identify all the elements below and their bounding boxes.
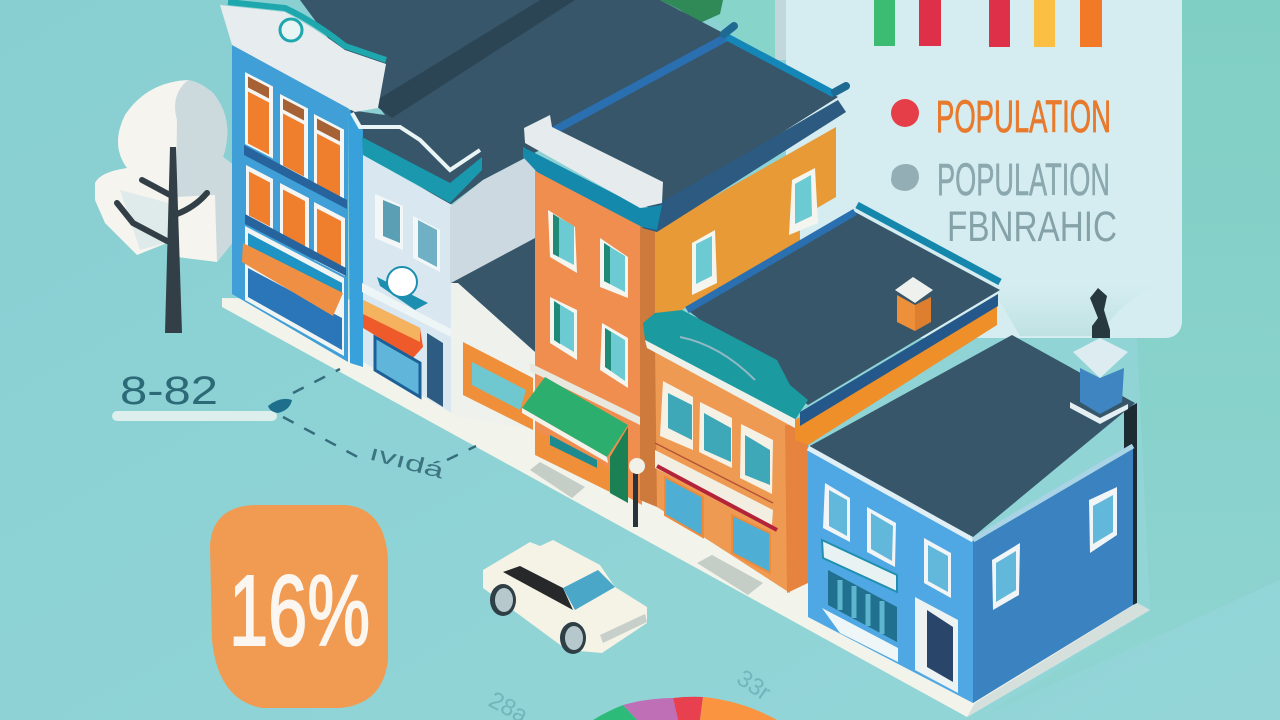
bar chart <box>874 0 1102 47</box>
legend item: population grey: FBNRAHIC <box>947 203 1117 251</box>
shop sign <box>822 540 897 592</box>
tree <box>95 80 253 333</box>
legend item: population grey: POPULATION <box>937 154 1110 205</box>
teal band under cornice <box>523 147 662 230</box>
car <box>483 540 647 654</box>
windows <box>660 381 773 494</box>
shop sign <box>363 300 423 358</box>
windows <box>548 168 818 388</box>
panel: population legend <box>775 0 1182 338</box>
ornate cornice <box>220 5 386 112</box>
legend item: population orange <box>891 91 1111 142</box>
building: orange brick <box>643 205 1000 593</box>
shopfront <box>655 450 773 525</box>
white cornice <box>524 115 663 208</box>
shop window <box>828 570 897 642</box>
round sign <box>377 267 428 310</box>
green tree behind roof <box>660 0 723 23</box>
tower ornament <box>1070 288 1128 424</box>
shop below green awning <box>530 363 640 492</box>
chimney <box>895 277 933 331</box>
dashed connectors <box>283 369 476 462</box>
sidewalk <box>222 298 1150 717</box>
windows <box>823 483 1117 610</box>
legend item: population grey <box>891 154 1117 251</box>
roofs: back row <box>300 0 727 205</box>
building: orange three storey <box>523 26 846 507</box>
windows <box>375 194 403 250</box>
roof <box>690 212 1000 405</box>
roof <box>553 37 838 210</box>
building: pale shop <box>352 113 535 413</box>
percentage badge: 16% <box>229 555 370 667</box>
road label: 8-82 <box>120 369 218 413</box>
pie labels <box>484 665 776 720</box>
garbled street text: ıvıdá <box>367 440 448 484</box>
road label <box>112 369 292 421</box>
shopfront <box>245 226 344 356</box>
percentage badge <box>210 505 388 708</box>
lamp post <box>629 458 645 527</box>
teal pediment <box>643 310 808 420</box>
legend item: population orange: POPULATION <box>936 91 1111 142</box>
pie chart <box>593 697 777 720</box>
pie labels: 33r <box>732 665 776 706</box>
upper windows <box>245 72 273 159</box>
green awning <box>522 377 628 503</box>
door <box>915 597 958 693</box>
building: blue shop <box>220 2 386 367</box>
lower roof and small shop <box>451 238 535 430</box>
awning <box>242 243 343 316</box>
building: blue corner <box>808 335 1137 703</box>
